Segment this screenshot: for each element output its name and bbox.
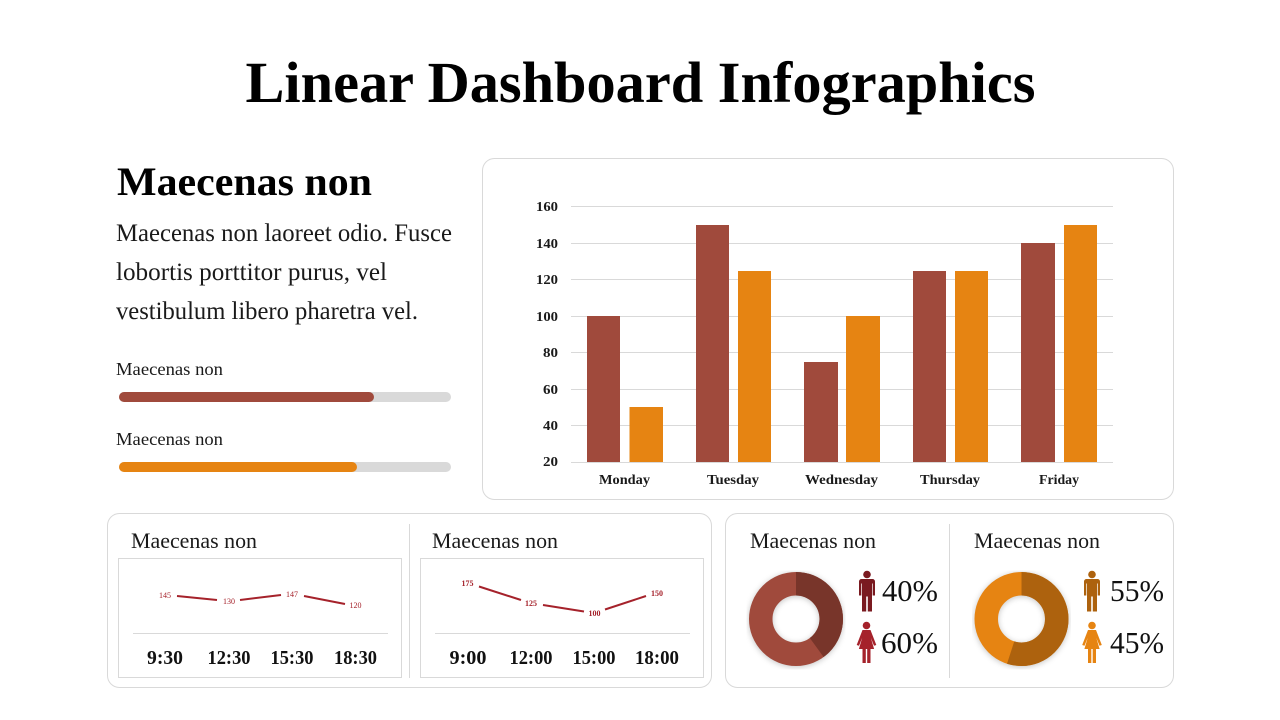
chart gridlines [571, 206, 1113, 462]
y axis labels: 100 [536, 310, 558, 325]
line chart 2: 18:00 [635, 647, 679, 669]
donut group 1: Maecenas non [750, 528, 876, 553]
icon: woman [1082, 622, 1102, 663]
text block: description: vestibulum libero pharetra vel. [116, 298, 418, 325]
line chart 1: 18:30 [334, 647, 377, 669]
progress bar 2: Maecenas non [116, 429, 223, 449]
text: 45%: 45% [1110, 625, 1164, 660]
line chart 1: Maecenas non [131, 528, 257, 553]
panel: bar chart [482, 158, 1174, 500]
bars: Monday [587, 316, 663, 462]
line chart 1: 147 [286, 590, 298, 599]
progress bar 1: Maecenas non [116, 359, 223, 379]
line chart 2: 100 [588, 609, 600, 618]
line chart 2: 15:00 [572, 647, 616, 669]
y axis labels: 60 [543, 383, 558, 398]
x axis labels: Thursday [920, 473, 980, 488]
bars: Friday [1021, 225, 1097, 462]
x axis labels: Friday [1039, 473, 1079, 488]
panel: line charts [108, 514, 712, 688]
y axis labels [536, 200, 558, 470]
bars: Wednesday [804, 316, 880, 462]
line chart 1: 120 [350, 601, 362, 610]
panel: intro text and progress bars [116, 159, 452, 472]
donut group 2 [974, 528, 1164, 663]
line chart 2: 12:00 [510, 647, 552, 669]
text: 40%: 40% [882, 573, 938, 608]
y axis labels: 120 [536, 273, 558, 288]
donut chart: 40/60 [761, 584, 831, 655]
line chart 1: 12:30 [208, 647, 250, 669]
line chart 1: 130 [223, 597, 235, 606]
text block: description [116, 220, 452, 325]
text block: description: lobortis porttitor purus, vel [116, 259, 387, 286]
y axis labels: 140 [536, 237, 558, 252]
line chart 2: 150 [651, 589, 663, 598]
line chart 2 [420, 528, 704, 678]
bars: Tuesday [696, 225, 771, 462]
text block: description: Maecenas non laoreet odio. Fusce [116, 220, 452, 247]
progress bar 2 [116, 429, 451, 472]
x axis labels: Monday [599, 473, 650, 488]
donut group 1 [750, 528, 938, 663]
y axis labels: 160 [536, 200, 558, 215]
line chart 2: 175 [462, 579, 474, 588]
panel: donut charts [726, 514, 1174, 688]
x axis labels: Tuesday [707, 473, 759, 488]
text: 60%: 60% [881, 625, 938, 660]
line chart 1: 145 [159, 591, 171, 600]
icon: man [859, 571, 875, 612]
progress bar 1 [116, 359, 451, 402]
icon: woman [857, 622, 876, 663]
text: 55%: 55% [1110, 573, 1164, 608]
icon: man [1084, 571, 1100, 612]
line chart 1: 15:30 [270, 647, 314, 669]
y axis labels: 40 [543, 419, 558, 434]
line chart 1 [118, 528, 402, 678]
x axis labels [599, 473, 1079, 488]
y axis labels: 80 [543, 346, 558, 361]
title: Linear Dashboard Infographics [246, 50, 1036, 115]
donut chart: 55/45 [986, 584, 1057, 655]
donut group 2: Maecenas non [974, 528, 1100, 553]
heading: Maecenas non: Maecenas non [117, 159, 372, 204]
line chart 2: 125 [525, 599, 537, 608]
x axis labels: Wednesday [805, 473, 878, 488]
bars: Thursday [913, 271, 988, 462]
line chart 1: 9:30 [147, 647, 183, 669]
line chart 2: 9:00 [450, 647, 486, 669]
line chart 2: Maecenas non [432, 528, 558, 553]
y axis labels: 20 [543, 455, 558, 470]
